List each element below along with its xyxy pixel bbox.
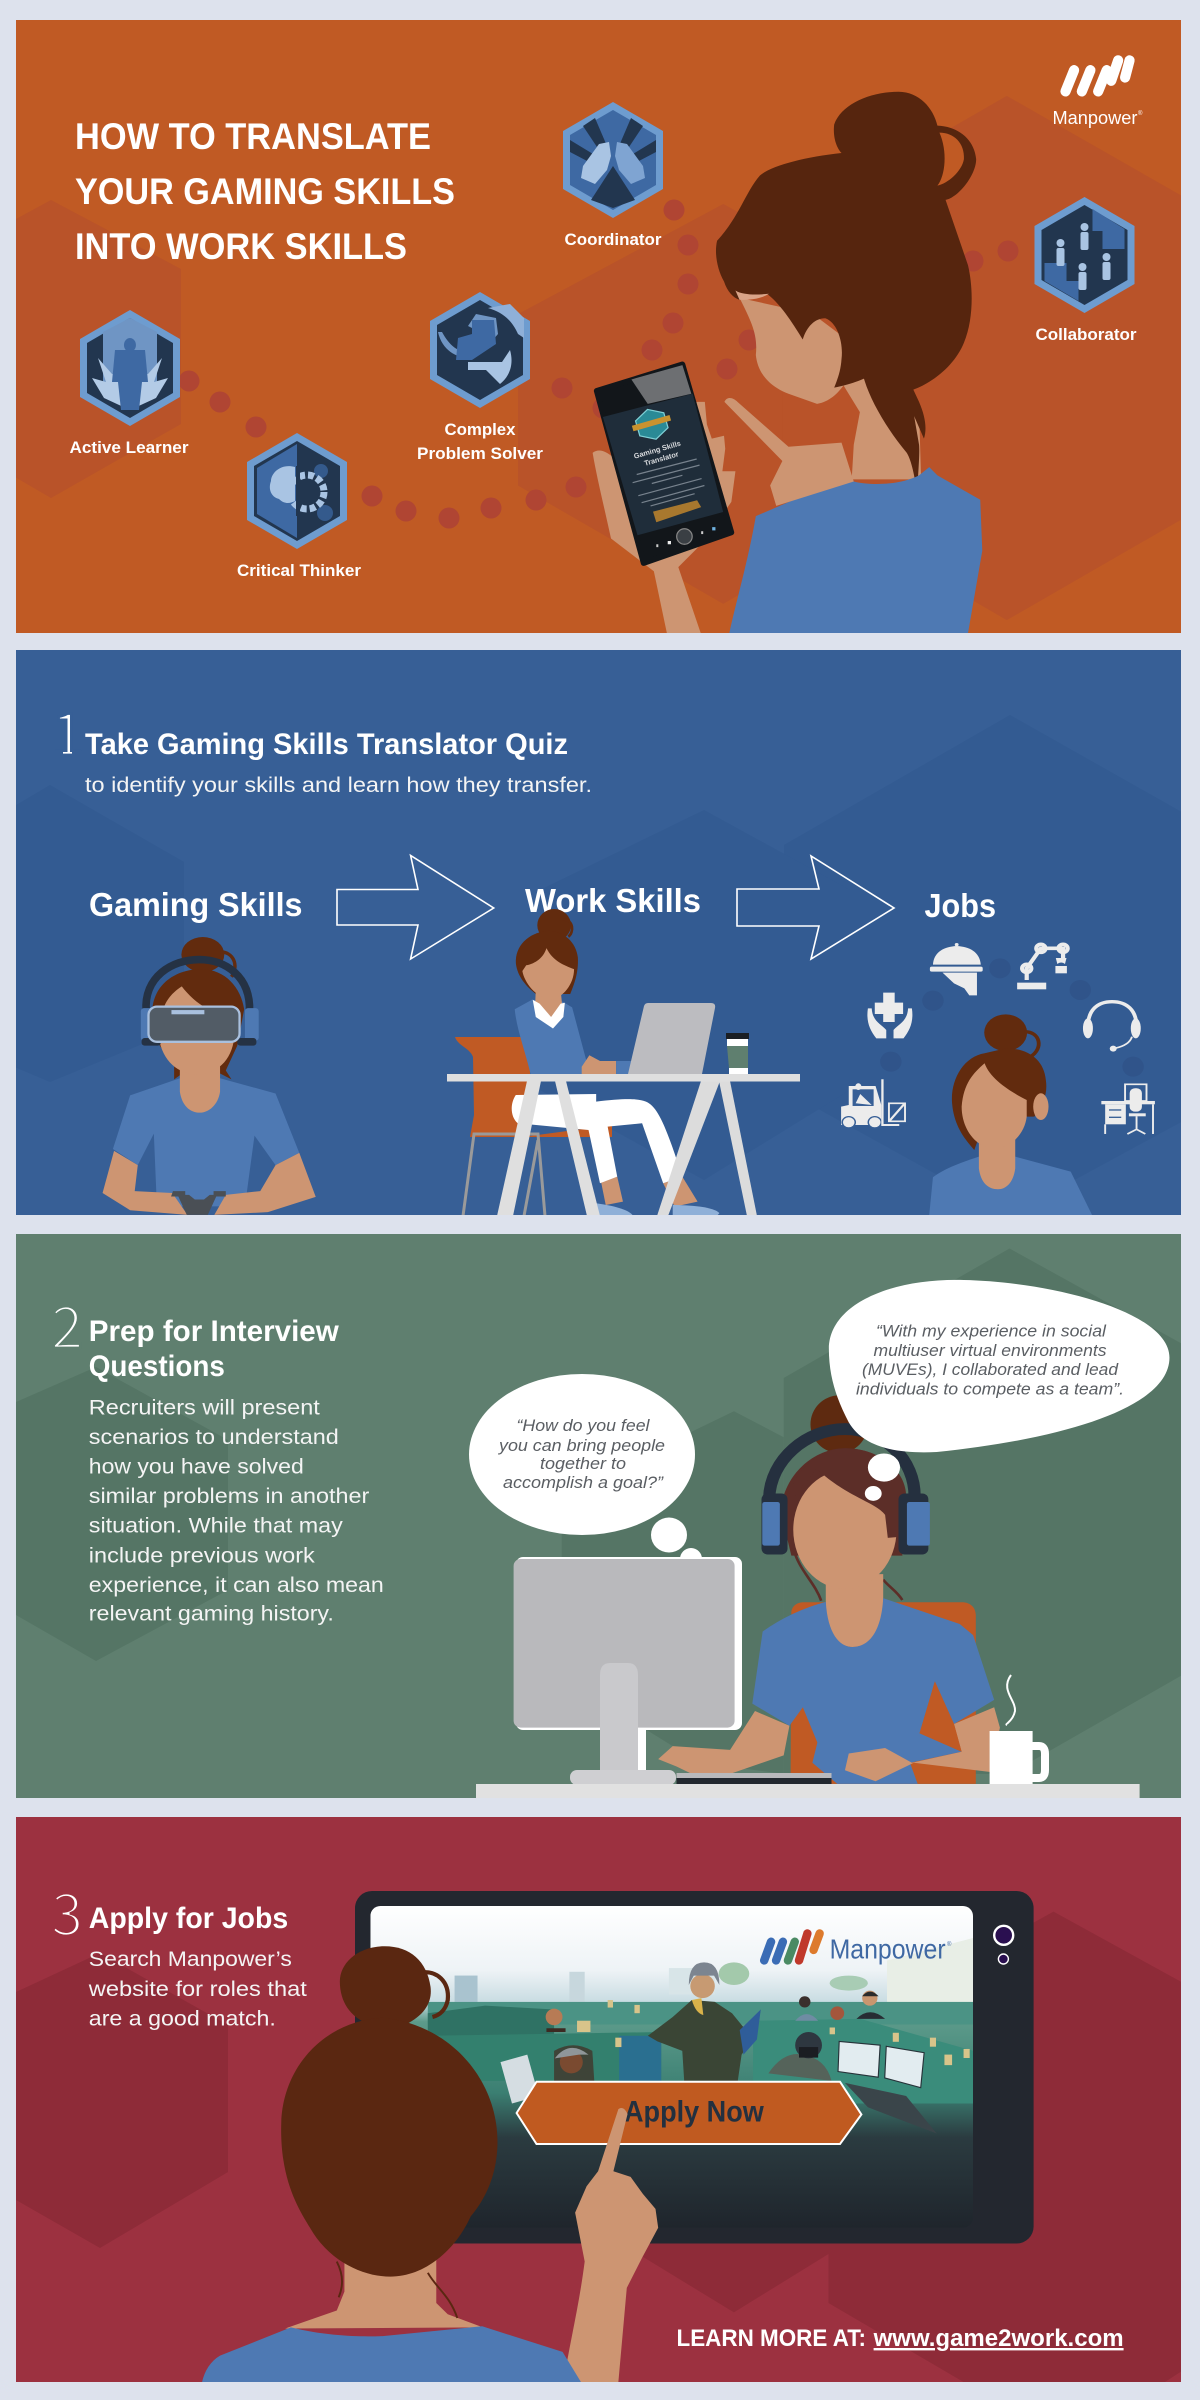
- pointing hand: [564, 2108, 658, 2382]
- bun: [810, 1395, 868, 1453]
- ear cups: [761, 1493, 930, 1554]
- body text: Recruiters will present: [89, 1396, 320, 1419]
- body text: situation. While that may: [89, 1515, 343, 1538]
- job seeker woman: [929, 1014, 1093, 1216]
- title: YOUR GAMING SKILLS: [75, 171, 455, 212]
- thought bubble: candidate: “With my experience in social: [876, 1322, 1107, 1341]
- step number 2: 2: [51, 1281, 83, 1365]
- learn more link: www.game2work.com: [873, 2325, 1124, 2352]
- hair wisps: [793, 1548, 902, 1601]
- chair: [791, 1602, 976, 1784]
- panel: step 2: [16, 1234, 1197, 1798]
- right desk struts: [657, 1081, 720, 1216]
- soldier left: [554, 2045, 594, 2081]
- dotted path: [178, 200, 1018, 528]
- coffee mug: [990, 1675, 1045, 1784]
- heading: prep for interview: [89, 1315, 339, 1383]
- camera lenses: [994, 1926, 1013, 1964]
- neck: [285, 2254, 483, 2329]
- arrow 2: [737, 856, 894, 959]
- thought bubble: recruiter: [469, 1374, 702, 1570]
- wisps: [337, 2262, 457, 2318]
- laptop: [628, 1003, 715, 1074]
- arrow 1: [337, 856, 494, 959]
- right chair sliver: [920, 1681, 962, 1752]
- step number 3: 3: [51, 1868, 83, 1952]
- cubicle rows: [428, 2002, 975, 2024]
- title: INTO WORK SKILLS: [75, 226, 407, 267]
- badge: complex problem solver: [430, 292, 530, 408]
- body text: relevant gaming history.: [89, 1603, 334, 1626]
- office worker at desk: [447, 909, 800, 1216]
- trouser legs and feet: [512, 1094, 719, 1216]
- logo: manpower colour: [764, 1933, 952, 1965]
- label: critical thinker: Critical Thinker: [237, 561, 361, 580]
- title: HOW TO TRANSLATE: [75, 116, 431, 157]
- thought bubble: recruiter: “How do you feel: [516, 1416, 651, 1435]
- shirt: [729, 467, 982, 633]
- thought bubble: candidate: [829, 1280, 1169, 1501]
- body text: similar problems in another: [89, 1485, 369, 1508]
- job icons: [841, 943, 1155, 1134]
- bun: [340, 1946, 431, 2024]
- logo: manpower white: [1052, 60, 1143, 128]
- coffee cup: [726, 1033, 749, 1074]
- apply now button: [517, 2082, 861, 2144]
- heading: prep for interview: Prep for Interview: [89, 1315, 339, 1348]
- hair: [716, 92, 976, 494]
- controller: [171, 1191, 226, 1215]
- thought bubble: candidate: multiuser virtual environments: [874, 1341, 1107, 1360]
- logo: manpower white: ®: [1138, 110, 1143, 117]
- label: active learner: Active Learner: [70, 438, 189, 457]
- panel: step 3: [16, 1817, 1197, 2400]
- icon: server with cloche: [930, 943, 983, 995]
- woman from behind: [202, 1946, 581, 2382]
- headband: [769, 1429, 915, 1498]
- desk top: [447, 1074, 800, 1082]
- badge: coordinator: [563, 102, 663, 218]
- keyboard: [676, 1773, 832, 1784]
- label: work skills: Work Skills: [525, 882, 701, 919]
- learn more link: [676, 2325, 1124, 2352]
- hair loop: [421, 1972, 448, 2017]
- body text: [89, 1396, 384, 1626]
- subheading: to identify your skills and learn how they transfer.: [85, 774, 592, 797]
- main hair: [281, 2018, 498, 2277]
- face: [793, 1470, 897, 1589]
- body text: include previous work: [89, 1544, 315, 1567]
- logo: manpower colour: Manpower: [830, 1934, 946, 1965]
- label: complex problem solver: Complex: [444, 420, 516, 439]
- pointing hand: [724, 398, 854, 506]
- holding hand and arm: [593, 402, 735, 633]
- distant city and trees: [455, 1976, 478, 2002]
- body text: scenarios to understand: [89, 1426, 339, 1449]
- neck: [826, 1574, 883, 1647]
- logo: manpower white: Manpower: [1052, 108, 1138, 128]
- badge: critical thinker: [247, 433, 347, 549]
- connector dots: [880, 958, 1144, 1077]
- headset cups: [140, 1008, 150, 1040]
- badge: collaborator: [1034, 197, 1134, 313]
- body text: Search Manpower’s: [89, 1948, 292, 1971]
- soldier woman: [648, 1962, 761, 2081]
- soldier at desk: [768, 2032, 832, 2081]
- bun: [181, 937, 224, 972]
- headband: [146, 960, 250, 1011]
- badge: active learner: [80, 310, 180, 426]
- screen: office scene: [370, 1906, 975, 2228]
- phone: Translator: [643, 449, 680, 468]
- neck and face: [180, 1061, 220, 1113]
- woman with headset: [658, 1395, 1000, 1784]
- goggles: [148, 1007, 240, 1042]
- shirt: [113, 1078, 299, 1206]
- torso and head: [515, 909, 651, 1080]
- woman holding phone: [593, 92, 982, 633]
- label: coordinator: Coordinator: [564, 230, 662, 249]
- apply now button: Apply Now: [624, 2096, 764, 2129]
- step number 1: 1: [52, 688, 84, 772]
- chair: [455, 1037, 612, 1137]
- monitor: [514, 1557, 742, 1785]
- phone app badge: [632, 408, 671, 440]
- thought bubble: candidate: individuals to compete as a team”.: [856, 1380, 1124, 1399]
- dual monitors: [838, 2041, 937, 2134]
- logo: manpower colour: ®: [947, 1941, 952, 1948]
- heading: apply for jobs: Apply for Jobs: [89, 1902, 288, 1935]
- tablet: [355, 1891, 1034, 2244]
- shirt: [752, 1598, 994, 1784]
- panel: step 1: [0, 650, 1200, 1216]
- arms: [103, 1151, 188, 1215]
- thought bubble: recruiter: accomplish a goal?”: [503, 1473, 664, 1492]
- face and neck: [740, 298, 921, 479]
- label: gaming skills: Gaming Skills: [89, 886, 302, 923]
- icon: forklift: [841, 1079, 905, 1128]
- thought bubble: recruiter: you can bring people: [498, 1436, 665, 1455]
- arms: [658, 1711, 789, 1781]
- panel: header: [0, 20, 1200, 633]
- thought bubble: recruiter: together to: [540, 1454, 626, 1473]
- forehead: [164, 986, 202, 1006]
- hair front: [788, 1448, 906, 1538]
- hair: [152, 969, 244, 1079]
- body text: [88, 1948, 307, 2031]
- label: collaborator: Collaborator: [1036, 325, 1137, 344]
- icon: robot arm: [1022, 944, 1068, 980]
- body text: are a good match.: [89, 2008, 276, 2031]
- desk: [476, 1784, 1140, 1798]
- icon: headset: [1083, 1002, 1141, 1052]
- phone: Gaming Skills: [633, 439, 682, 461]
- icon: medical hands: [867, 993, 912, 1038]
- learn more link: LEARN MORE AT:: [676, 2325, 866, 2352]
- body text: how you have solved: [89, 1456, 304, 1478]
- title: [75, 116, 455, 267]
- label: complex problem solver: [418, 423, 543, 459]
- heading: take quiz: Take Gaming Skills Translator Quiz: [85, 728, 568, 761]
- phone: [597, 364, 731, 563]
- label: jobs: Jobs: [924, 887, 996, 924]
- icon: office desk: [1101, 1084, 1155, 1134]
- heading: prep for interview: Questions: [89, 1350, 225, 1383]
- hair back: [781, 1448, 906, 1556]
- body text: experience, it can also mean: [89, 1574, 384, 1597]
- VR gamer: [103, 937, 316, 1215]
- coworkers: [546, 1991, 885, 2032]
- left desk struts: [497, 1081, 541, 1216]
- thought bubble: candidate: (MUVEs), I collaborated and lead: [862, 1360, 1119, 1379]
- shirt: [202, 2326, 581, 2382]
- body text: website for roles that: [88, 1978, 307, 2001]
- label: complex problem solver: Problem Solver: [417, 444, 543, 463]
